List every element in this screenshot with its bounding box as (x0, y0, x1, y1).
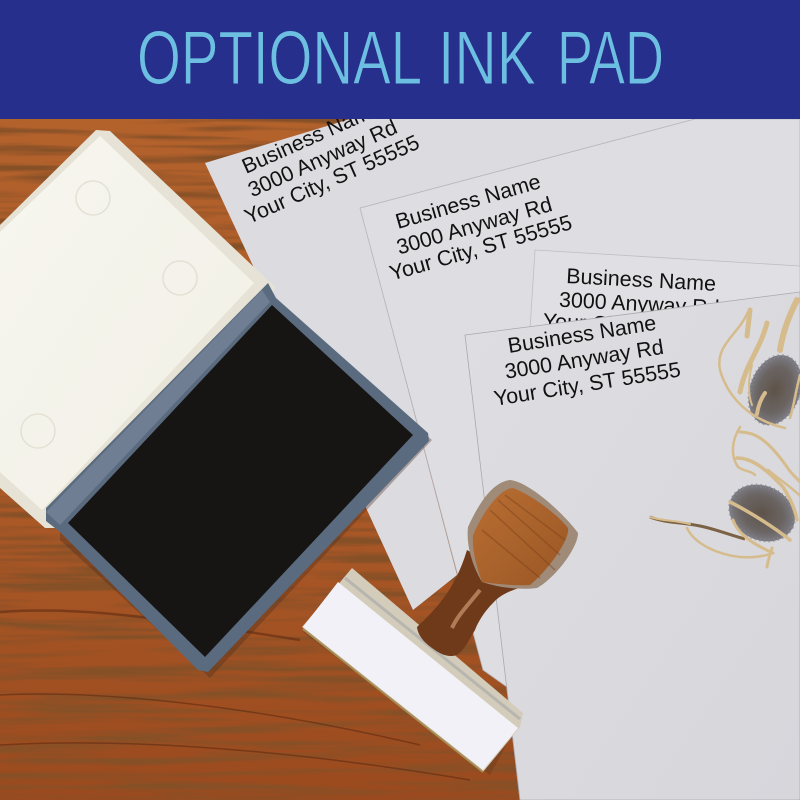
thistle: upper (719, 300, 800, 432)
address text: envelope two: Your City, ST 55555 (387, 210, 575, 285)
envelope: third (530, 250, 800, 343)
address text: envelope three (542, 263, 734, 343)
ink pad (0, 130, 432, 678)
address text: envelope one: 3000 Anyway Rd (244, 115, 401, 202)
lid dimples (21, 181, 197, 448)
handle top (473, 488, 568, 585)
title: OPTIONAL (137, 16, 420, 101)
handle neck (417, 550, 530, 656)
handle rim (468, 480, 578, 589)
address text: envelope three: Your City, ST 55555 (542, 309, 732, 343)
address text: envelope two: 3000 Anyway Rd (394, 192, 555, 259)
address text: envelope one (222, 87, 423, 229)
address text: envelope one: Your City, ST 55555 (241, 130, 423, 229)
white block (303, 582, 518, 770)
shadow (60, 300, 432, 678)
black ink felt (68, 305, 413, 657)
address text: envelope three: Business Name (566, 264, 717, 296)
pad base (46, 283, 429, 672)
rubber stamp (302, 480, 578, 775)
address text: envelope four: 3000 Anyway Rd (503, 335, 665, 384)
envelope: second (360, 119, 800, 800)
stamp shadow (303, 580, 520, 775)
address text: envelope four (484, 308, 682, 411)
open lid (0, 130, 275, 528)
address text: envelope three: 3000 Anyway Rd (558, 288, 720, 320)
envelope: back left (205, 87, 700, 610)
title: INK (438, 16, 536, 101)
wood table background (0, 119, 560, 800)
address text: envelope four: Your City, ST 55555 (492, 358, 682, 411)
address text: envelope one: Business Name (238, 96, 385, 179)
address text: envelope four: Business Name (506, 311, 658, 358)
base back rail (302, 568, 523, 772)
title: PAD (557, 16, 664, 101)
address text: envelope two (374, 164, 575, 285)
banner (0, 0, 800, 119)
envelope: front (465, 292, 800, 800)
thistle: lower (650, 427, 800, 567)
gold edge (303, 629, 483, 772)
address text: envelope two: Business Name (393, 169, 543, 234)
